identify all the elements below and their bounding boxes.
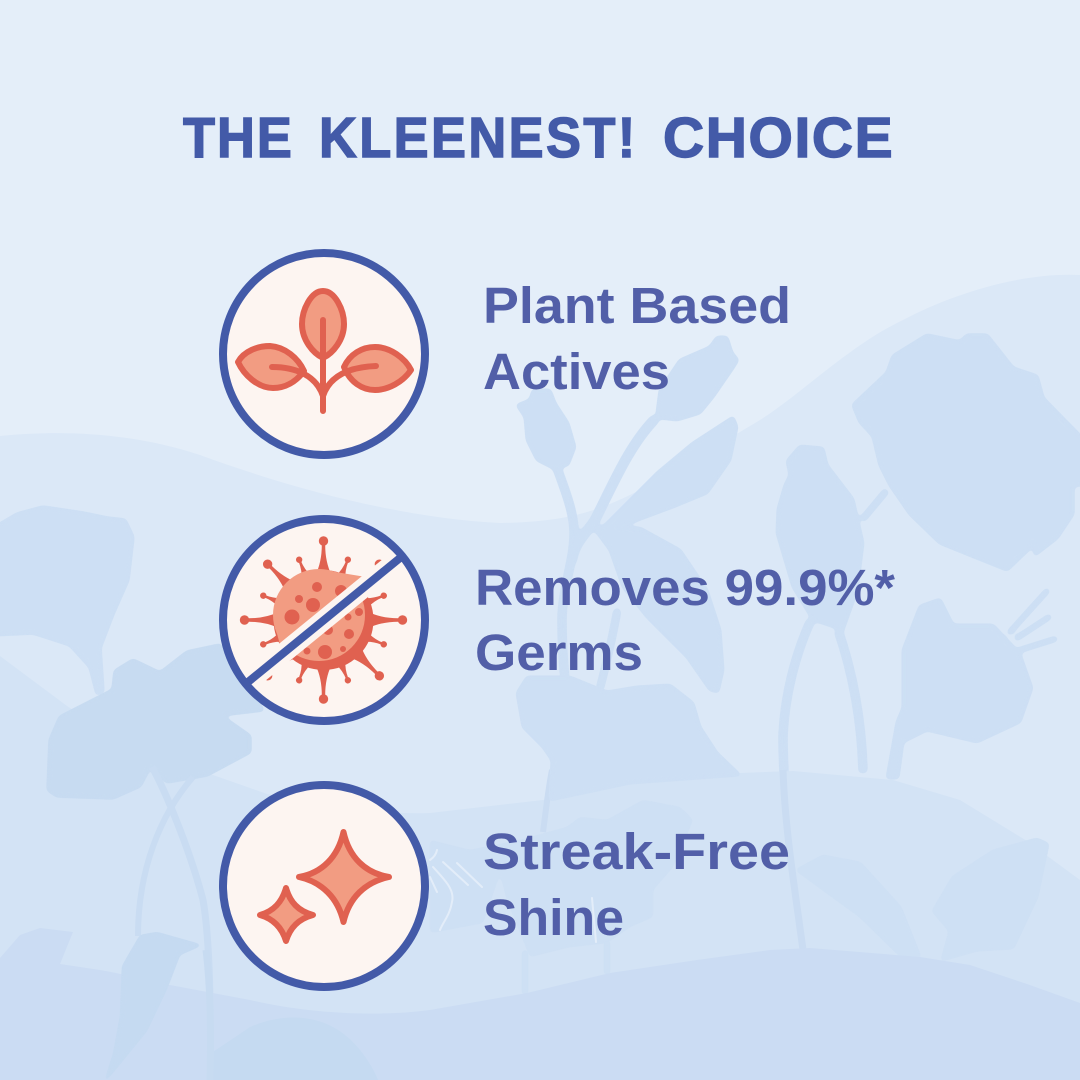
- background: white dandelion strokes: [430, 850, 596, 942]
- ring: [223, 519, 425, 721]
- background: central top flower: [517, 677, 740, 800]
- background: faint central flower: [430, 800, 693, 957]
- background: right poppy pod and stems: [777, 446, 887, 950]
- background: middle hill: [0, 656, 1080, 1080]
- background: right side flower with stamens: [887, 591, 1055, 778]
- label: removes germs: Germs: [475, 624, 643, 681]
- label: streak-free shine: Streak-Free: [483, 823, 790, 880]
- background: redrawn lower stems over the middle hill: [543, 770, 803, 950]
- background: left flower stems: [138, 767, 210, 1080]
- background: right large flower: [853, 335, 1080, 570]
- background: upper hill: [0, 275, 1080, 1080]
- background: top-left flower: [0, 507, 133, 694]
- title: CHOICE: [663, 106, 894, 170]
- background: bottom hill: [0, 928, 1080, 1080]
- background: stem over bottom hill: [206, 950, 211, 1080]
- label: plant based actives: Plant Based: [483, 277, 791, 334]
- icon: crossed-out germ: [223, 519, 425, 721]
- label: streak-free shine: [483, 823, 790, 946]
- background: left large flower: [48, 645, 263, 798]
- label: plant based actives: Actives: [483, 343, 670, 400]
- prohibition slash: [246, 556, 402, 684]
- icon: plant leaves: [223, 253, 425, 455]
- icon: sparkles: [223, 785, 425, 987]
- background: lower right leaf and flower: [525, 839, 1048, 995]
- germ: [240, 536, 407, 704]
- label: streak-free shine: Shine: [483, 889, 624, 946]
- label: plant based actives: [483, 277, 791, 400]
- title: KLEENEST!: [319, 105, 638, 169]
- background: bottom left leaf: [103, 932, 203, 1080]
- title: [183, 105, 894, 170]
- label: removes germs: [475, 559, 895, 681]
- background: bottom shadow flower: [210, 1018, 378, 1080]
- background: upper-centre flower with leaves and pods: [517, 337, 738, 692]
- label: removes germs: Removes 99.9%*: [475, 559, 895, 616]
- title: THE: [183, 105, 294, 169]
